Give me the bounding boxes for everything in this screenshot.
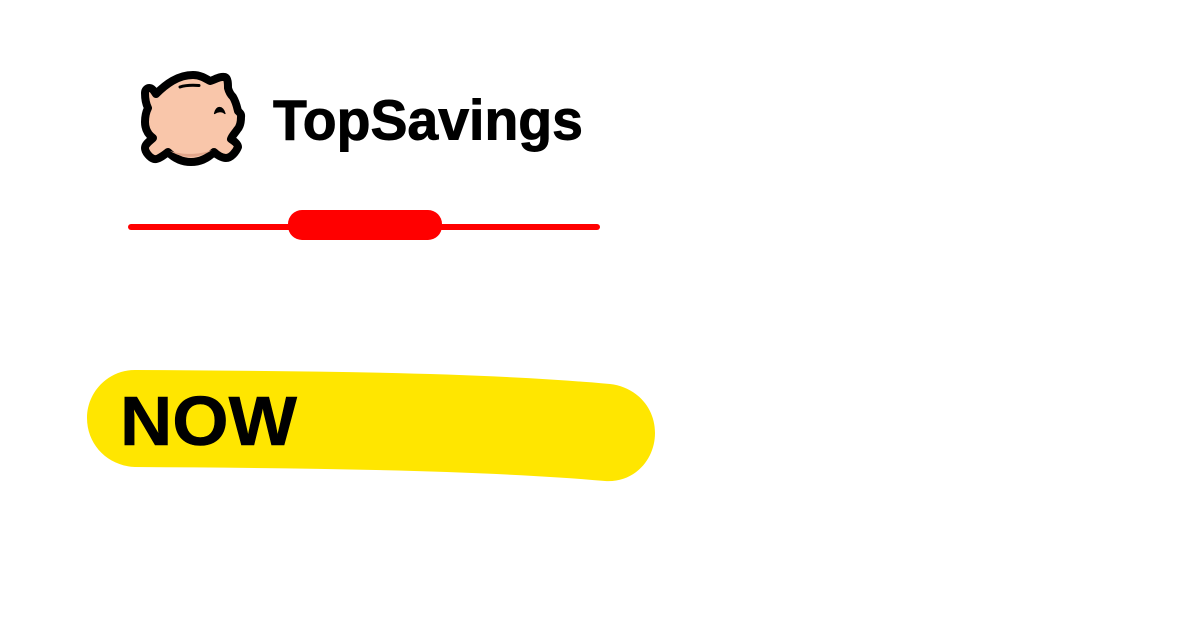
divider with red pill <box>128 210 600 240</box>
wordmark: TopSavings <box>273 88 583 152</box>
logo: TopSavings <box>145 75 583 162</box>
belly shading <box>170 150 212 157</box>
red line <box>128 224 600 230</box>
coin slot <box>180 85 199 87</box>
pig body <box>145 75 241 162</box>
icon: piggy bank <box>145 75 241 162</box>
yellow brush stroke <box>87 370 655 481</box>
highlighted label <box>87 370 655 481</box>
closed eye <box>214 108 225 114</box>
red pill <box>288 210 442 240</box>
label text: NOW <box>120 382 297 460</box>
